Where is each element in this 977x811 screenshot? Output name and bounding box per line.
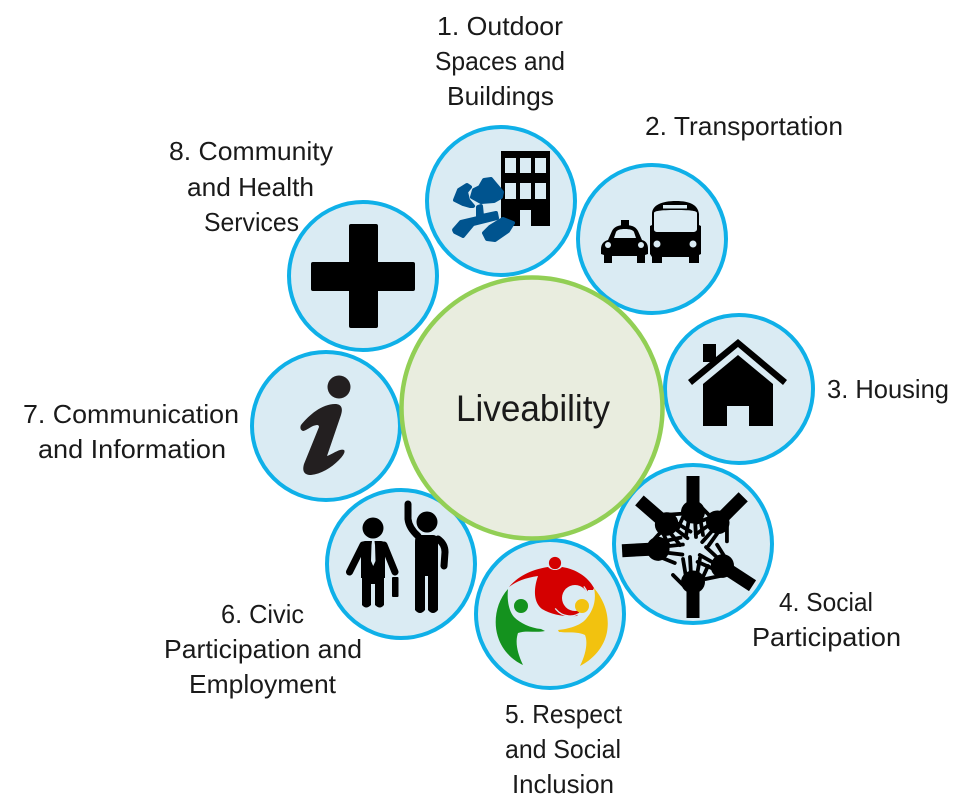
icon: italic i <box>300 376 350 475</box>
label 2: 2. Transportation <box>645 111 843 141</box>
label 6: Participation and <box>164 634 362 664</box>
label 8: 8. Community <box>169 136 333 166</box>
label 6 <box>164 599 362 699</box>
icon: trees <box>454 179 513 240</box>
icon: three people embracing <box>496 556 608 666</box>
label 8: Services <box>204 207 299 237</box>
icon: person raising hand <box>408 504 445 613</box>
label 7: and Information <box>38 434 226 464</box>
label 7: 7. Communication <box>23 399 239 429</box>
label 3: 3. Housing <box>827 374 949 404</box>
icon: medical cross <box>311 224 415 328</box>
label 5: Inclusion <box>512 769 614 799</box>
circle 7: communication and information <box>252 352 400 500</box>
label 1: Buildings <box>447 81 554 111</box>
label 7 <box>23 399 239 464</box>
label 1: 1. Outdoor <box>437 11 563 41</box>
label 8: and Health <box>187 172 314 202</box>
label 4 <box>752 587 901 652</box>
label 6: 6. Civic <box>221 599 304 629</box>
label 1 <box>435 11 565 111</box>
label 1: Spaces and <box>435 46 565 76</box>
label 4: 4. Social <box>779 587 873 617</box>
icon: joined hands <box>621 476 761 618</box>
central label: Liveability <box>456 388 610 429</box>
circle 1: outdoor spaces and buildings <box>427 127 575 275</box>
circle 3: housing <box>665 315 813 463</box>
icon: building <box>501 151 550 226</box>
label 5: 5. Respect <box>505 699 623 729</box>
circle 8: community and health services <box>289 202 437 350</box>
icon: businessman with briefcase <box>350 518 398 608</box>
circle 2: transportation <box>578 165 726 313</box>
label 5: and Social <box>505 734 621 764</box>
label 6: Employment <box>189 669 337 699</box>
label 4: Participation <box>752 622 901 652</box>
circle 5: respect and social inclusion <box>476 540 624 688</box>
label 8 <box>169 136 333 237</box>
icon: house <box>688 339 787 426</box>
icon: taxi <box>601 220 648 263</box>
central circle: liveability <box>402 278 662 538</box>
circle 4: social participation <box>614 465 772 623</box>
label 5 <box>505 699 623 799</box>
icon: bus <box>650 201 701 263</box>
circle 6: civic participation and employment <box>327 490 475 638</box>
